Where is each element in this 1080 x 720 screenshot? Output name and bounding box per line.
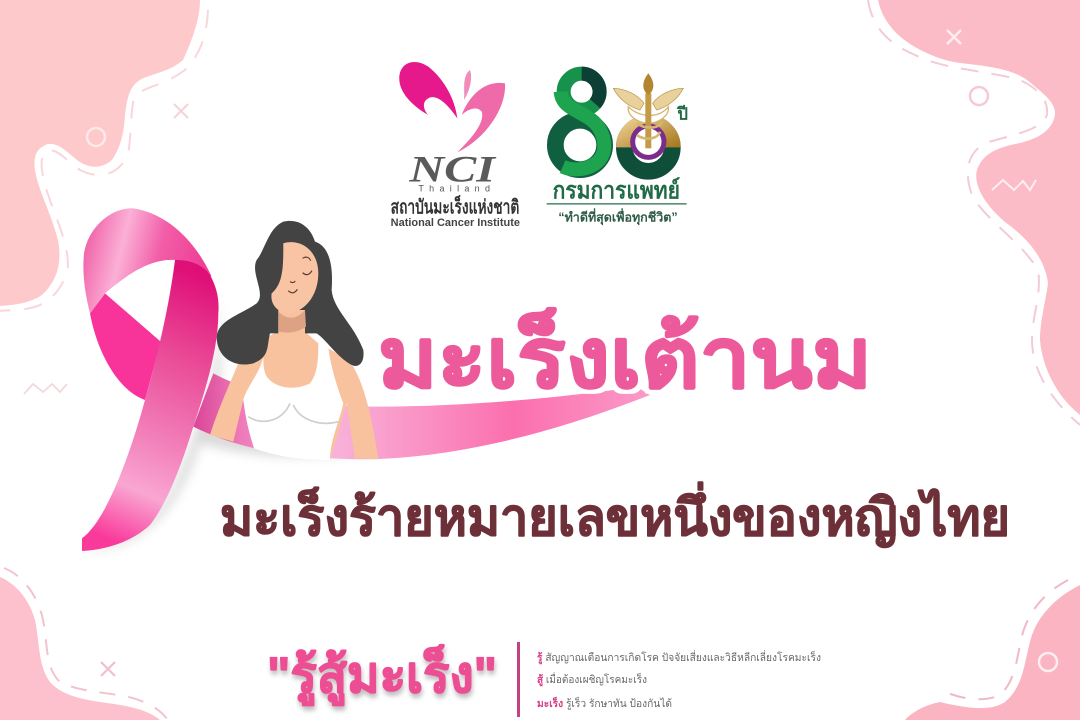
ribbon top loop: [83, 208, 212, 313]
campaign name: "รู้สู้มะเร็ง": [267, 644, 497, 706]
background blob: bottom left: [0, 568, 168, 720]
number 8: [555, 74, 605, 170]
purple ring: [633, 126, 664, 157]
subtitle: มะเร็งร้ายหมายเลขหนึ่งของหญิงไทย: [220, 482, 1010, 547]
Thai institute name: สถาบันมะเร็งแห่งชาติ: [391, 194, 519, 218]
neck: [278, 310, 305, 337]
logo: Department of Medical Services 80 years: [547, 73, 688, 226]
Thai department name: กรมการแพทย์: [553, 176, 680, 204]
background blob: top left: [0, 0, 208, 394]
pink awareness ribbon: [82, 208, 650, 552]
illustration: woman with dark wavy hair: [210, 221, 378, 460]
white top: [243, 342, 343, 460]
main title: มะเร็งเต้านม: [378, 307, 872, 405]
hair: [217, 221, 364, 366]
facial features: [288, 257, 312, 293]
Thailand: Thailand: [418, 184, 490, 194]
number 0: [624, 123, 672, 171]
campaign explanation lines: รู้ สัญญาณเตือนการเกิดโรค ปัจจัยเสี่ยงและวิธีหลีกเลี่ยงโรคมะเร็ง: [537, 650, 821, 665]
background blob: top right: [868, 0, 1080, 425]
ribbon shadow: [83, 300, 510, 552]
right ribbon tail: [193, 373, 650, 459]
caduceus emblem: [613, 73, 683, 148]
slogan: “ทำดีที่สุดเพื่อทุกชีวิต”: [558, 208, 678, 226]
campaign explanation lines: [537, 650, 821, 710]
campaign explanation lines: สู้ เมื่อต้องเผชิญโรคมะเร็ง: [537, 672, 647, 687]
ribbon front strand: [82, 260, 219, 551]
butterfly mark: [399, 62, 505, 152]
NCI script wordmark: NCI: [408, 150, 497, 191]
logo: National Cancer Institute: [391, 62, 520, 229]
years mark: ปี: [676, 104, 688, 123]
arms and chest: [210, 332, 378, 460]
background blob: bottom right: [905, 580, 1080, 720]
rear ribbon fold: [90, 293, 161, 400]
campaign explanation lines: มะเร็ง รู้เร็ว รักษาทัน ป้องกันได้: [537, 696, 672, 710]
English institute name: National Cancer Institute: [391, 217, 520, 229]
divider bar: [517, 642, 520, 717]
face: [271, 242, 318, 313]
